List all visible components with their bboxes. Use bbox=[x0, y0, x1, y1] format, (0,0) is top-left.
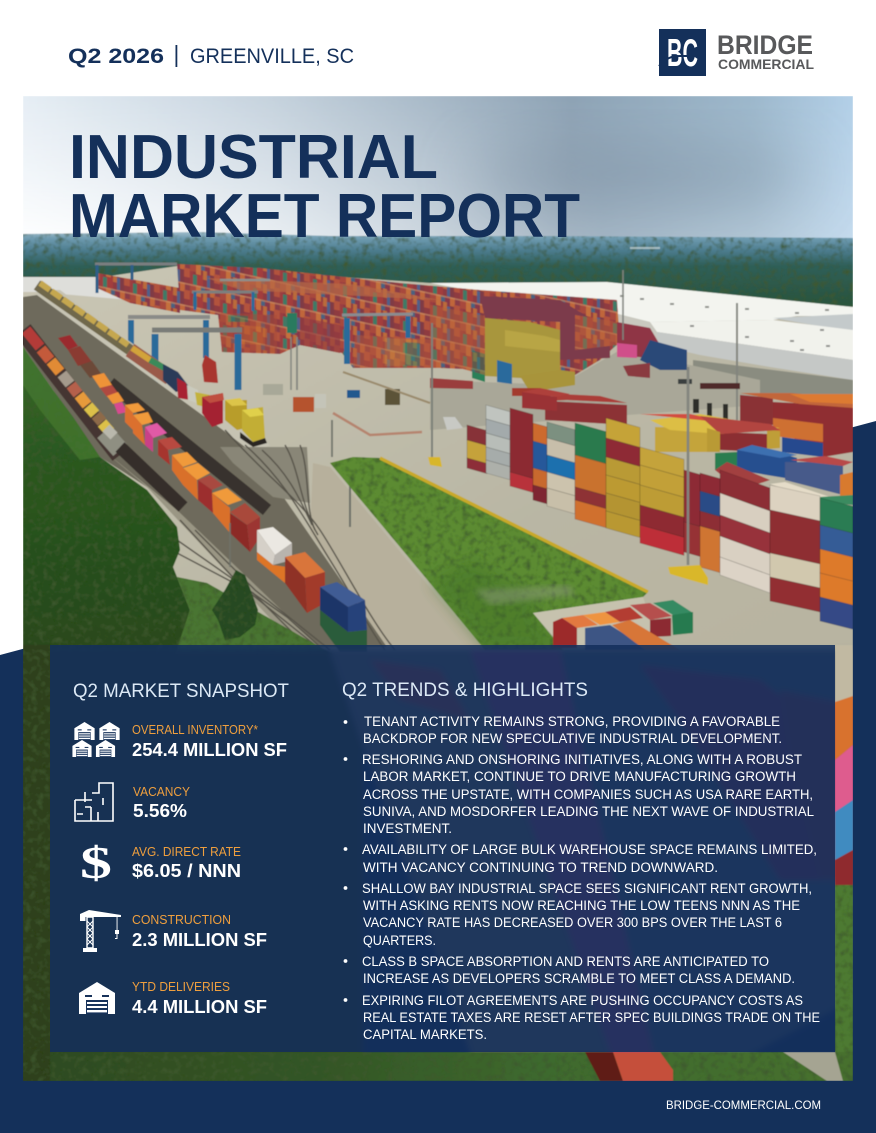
header: report period and location: Q2 2026 bbox=[68, 45, 164, 68]
footer: website: BRIDGE-COMMERCIAL.COM bbox=[666, 1100, 821, 1112]
distant hills and tree line bbox=[23, 232, 853, 312]
rail cars bbox=[23, 283, 367, 652]
bullet: FILOT agreements: CAPITAL MARKETS. bbox=[363, 1027, 487, 1042]
stat: average direct rate: AVG. DIRECT RATE bbox=[132, 845, 241, 859]
gantry cranes bbox=[95, 264, 413, 392]
bullet: tenant activity: BACKDROP FOR NEW SPECULATIVE INDUSTRIAL DEVELOPMENT. bbox=[363, 731, 782, 746]
title: INDUSTRIAL bbox=[69, 123, 438, 192]
rail yard ground and tracks bbox=[23, 290, 422, 648]
icon: warehouse bbox=[79, 982, 115, 1014]
small container cluster bbox=[553, 600, 693, 650]
stat: vacancy: VACANCY bbox=[133, 785, 191, 799]
stat: construction bbox=[80, 910, 267, 952]
far container stacks bbox=[97, 264, 687, 396]
yard vehicles, light poles and barriers bbox=[230, 270, 740, 567]
main train bbox=[58, 335, 367, 652]
sky bbox=[23, 96, 853, 241]
stat: construction: 2.3 MILLION SF bbox=[132, 930, 267, 950]
container stacks, back row bbox=[740, 393, 853, 457]
bullet: tenant activity: TENANT ACTIVITY REMAINS STRONG, PROVIDING A FAVORABLE bbox=[364, 714, 780, 729]
bullet: class B space: INCREASE AS DEVELOPERS SCRAMBLE TO MEET CLASS A DEMAND. bbox=[363, 971, 795, 986]
heading: Q2 trends and highlights: Q2 TRENDS & HIGHLIGHTS bbox=[342, 680, 588, 701]
stat: overall inventory bbox=[72, 722, 287, 760]
container stacks, front row bbox=[715, 445, 853, 505]
bullet: bulk warehouse availability bbox=[344, 842, 817, 875]
stat: average direct rate bbox=[80, 837, 241, 888]
foreground pole and bases bbox=[668, 367, 708, 585]
title bbox=[69, 123, 580, 251]
grass strip near rail bbox=[176, 576, 322, 650]
bullet: shallow bay: WITH ASKING RENTS NOW REACHING THE LOW TEENS NNN AS THE bbox=[363, 898, 800, 913]
bullet: shallow bay: SHALLOW BAY INDUSTRIAL SPACE SEES SIGNIFICANT RENT GROWTH, bbox=[362, 881, 812, 896]
logo: Bridge Commercial bbox=[659, 29, 814, 76]
stat: construction: CONSTRUCTION bbox=[132, 913, 231, 927]
bullet: reshoring: RESHORING AND ONSHORING INITIATIVES, ALONG WITH A ROBUST bbox=[362, 752, 802, 767]
bullet: reshoring bbox=[344, 752, 814, 836]
header: report period and location: GREENVILLE, SC bbox=[190, 45, 354, 68]
bullet: shallow bay bbox=[344, 881, 812, 948]
bullet: FILOT agreements: REAL ESTATE TAXES ARE RESET AFTER SPEC BUILDINGS TRADE ON THE bbox=[363, 1010, 820, 1025]
far train bbox=[23, 330, 120, 455]
bullet: shallow bay: VACANCY RATE HAS DECREASED OVER 300 BPS OVER THE LAST 6 bbox=[363, 915, 782, 930]
stat: overall inventory: OVERALL INVENTORY* bbox=[132, 723, 258, 737]
logo: Bridge Commercial: BC bbox=[667, 32, 698, 75]
stat: YTD deliveries: YTD DELIVERIES bbox=[132, 980, 230, 994]
bullet: reshoring: LABOR MARKET, CONTINUE TO DRIVE MANUFACTURING GROWTH bbox=[363, 769, 796, 784]
bullet: bulk warehouse availability: AVAILABILITY OF LARGE BULK WAREHOUSE SPACE REMAINS LIMITED, bbox=[362, 842, 817, 857]
stat: average direct rate: $6.05 / NNN bbox=[132, 861, 241, 881]
bullet: reshoring: SUNIVA, AND MOSDORFER LEADING THE NEXT WAVE OF INDUSTRIAL bbox=[363, 804, 814, 819]
logo: Bridge Commercial: COMMERCIAL bbox=[718, 56, 814, 72]
bullet: reshoring: ACROSS THE UPSTATE, WITH COMPANIES SUCH AS USA RARE EARTH, bbox=[363, 787, 813, 802]
bullet: FILOT agreements: EXPIRING FILOT AGREEMENTS ARE PUSHING OCCUPANCY COSTS AS bbox=[362, 993, 803, 1008]
heading: Q2 market snapshot: Q2 MARKET SNAPSHOT bbox=[73, 681, 289, 702]
container stacks, upper yellow row bbox=[522, 388, 780, 470]
bullet: reshoring: INVESTMENT. bbox=[363, 821, 452, 836]
icon: floor plan bbox=[75, 783, 113, 821]
icon: dollar sign: $ bbox=[80, 837, 112, 888]
darker yard behind right stacks bbox=[430, 350, 760, 430]
stat: vacancy: 5.56% bbox=[133, 801, 187, 821]
header: report period and location bbox=[68, 45, 354, 68]
stat: vacancy bbox=[75, 783, 191, 821]
stat: YTD deliveries bbox=[79, 980, 267, 1017]
bullet: class B space bbox=[344, 954, 795, 986]
icon: four warehouses bbox=[72, 722, 120, 757]
navy angled background shape bbox=[0, 421, 876, 1133]
stat: overall inventory: 254.4 MILLION SF bbox=[132, 740, 287, 760]
stat: YTD deliveries: 4.4 MILLION SF bbox=[132, 997, 267, 1017]
bullet: tenant activity bbox=[344, 714, 782, 746]
panel: translucent navy content box bbox=[50, 645, 835, 1052]
bullet: FILOT agreements bbox=[344, 993, 820, 1042]
flat cars bbox=[110, 383, 267, 510]
warehouse buildings bbox=[430, 282, 853, 398]
container stacks, main block bbox=[467, 405, 720, 573]
bullet: class B space: CLASS B SPACE ABSORPTION AND RENTS ARE ANTICIPATED TO bbox=[362, 954, 769, 969]
title: MARKET REPORT bbox=[69, 182, 580, 251]
bullet: shallow bay: QUARTERS. bbox=[363, 933, 436, 948]
icon: tower crane bbox=[80, 910, 121, 952]
grass median bbox=[330, 457, 660, 650]
concrete yard bbox=[23, 265, 853, 652]
bullet: bulk warehouse availability: WITH VACANCY CONTINUING TO TREND DOWNWARD. bbox=[363, 860, 718, 875]
upper train bbox=[37, 283, 267, 447]
logo: Bridge Commercial: BRIDGE bbox=[717, 30, 813, 60]
lower scene seen through panel and at bottom edge bbox=[23, 645, 853, 1081]
small conifer tree bbox=[212, 570, 258, 640]
lower left pine trees bbox=[23, 348, 191, 654]
